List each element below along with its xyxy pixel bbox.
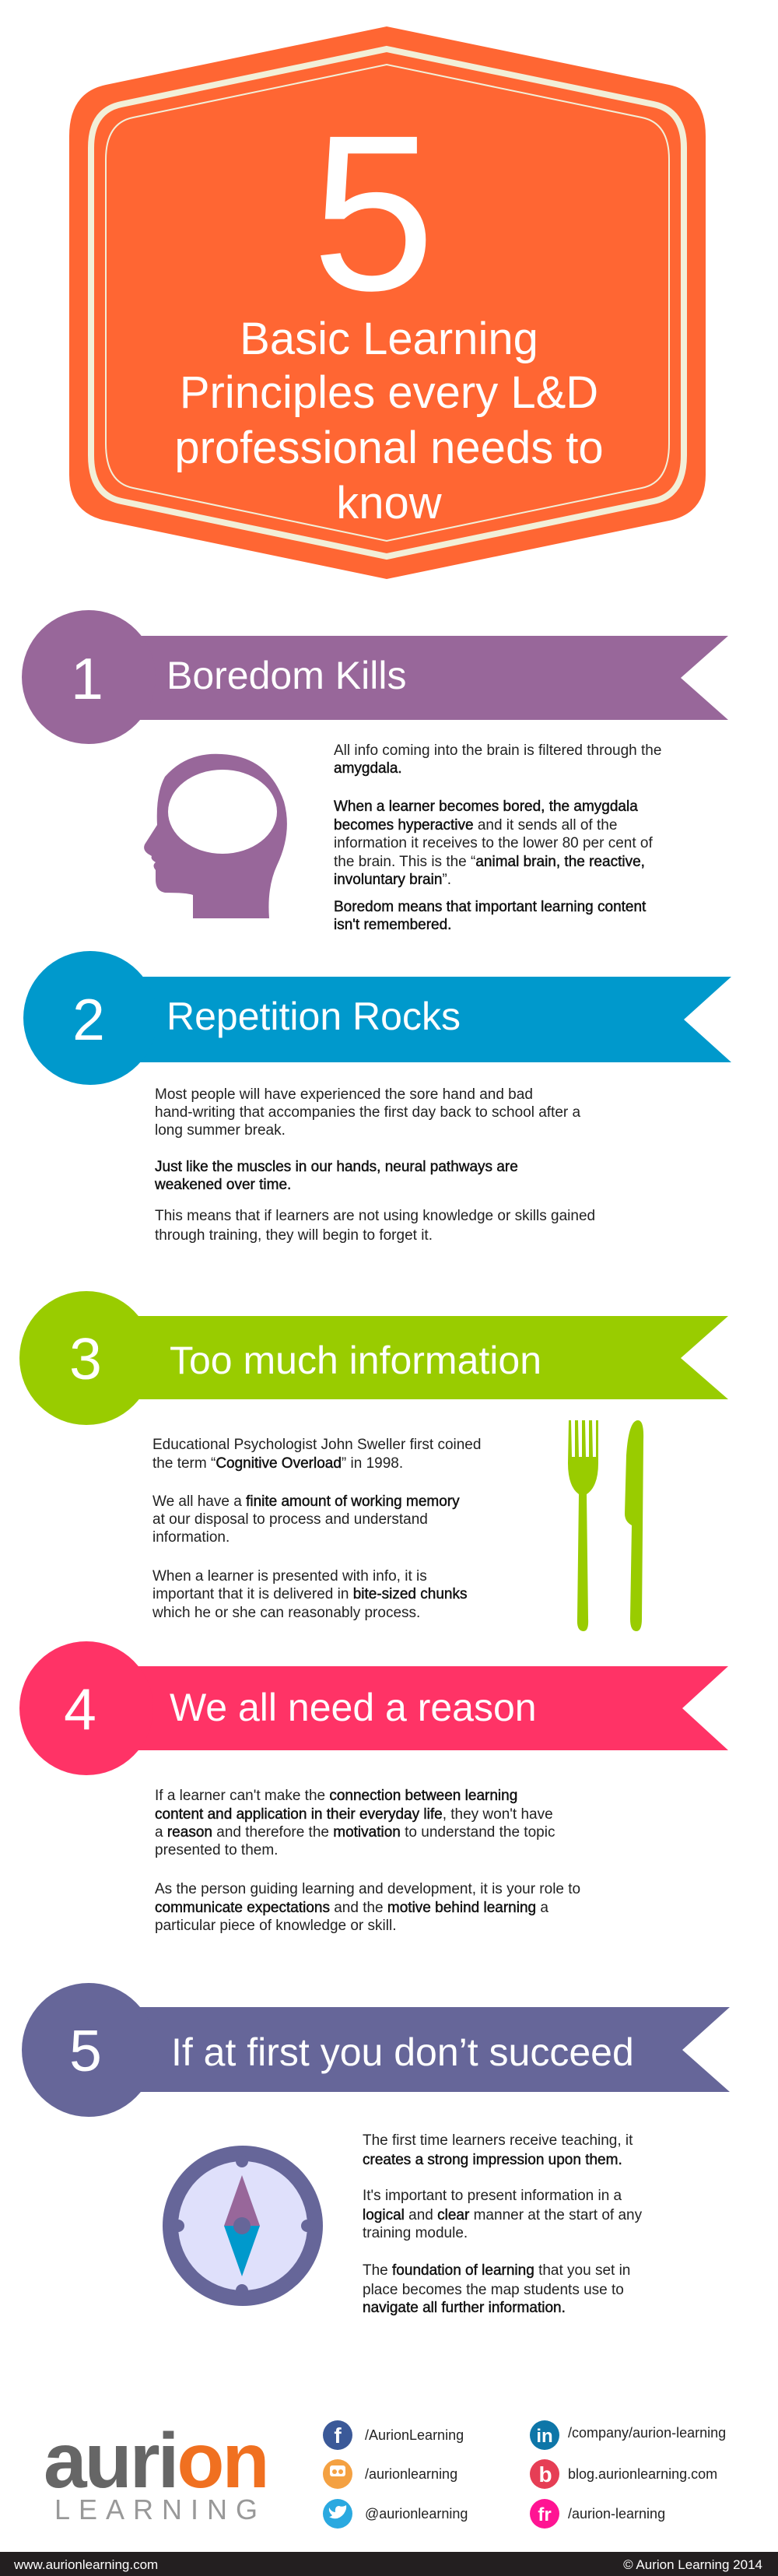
text: section 2: weakened over time.: [154, 1177, 291, 1193]
banner 4: We all need a reason: [19, 1641, 728, 1775]
banner 2: Repetition Rocks: Repetition Rocks: [166, 995, 461, 1038]
text: section 3: When a learner is presented with info, it is: [152, 1568, 427, 1585]
banner 3: Too much information: Too much information: [170, 1339, 541, 1382]
icon: blog: [530, 2459, 559, 2489]
icon: friendfeed: fr: [538, 2504, 552, 2525]
footer bar: www.aurionlearning.com: [13, 2557, 158, 2572]
header title: Basic Learning: [240, 314, 538, 364]
text: section 3: important that it is delivered in bite-sized chunks: [152, 1586, 467, 1602]
icon: facebook: f: [334, 2423, 342, 2448]
banner 5: If at first you don't succeed: If at first you don’t succeed: [171, 2030, 634, 2074]
text: section 5: [363, 2132, 643, 2316]
header badge: [69, 26, 706, 579]
social links: /company/aurion-learning: [568, 2425, 726, 2441]
banner 5: If at first you don't succeed: 5: [69, 2018, 102, 2083]
social links: blog.aurionlearning.com: [568, 2466, 717, 2482]
social links: [323, 2420, 726, 2529]
text: section 1: When a learner becomes bored, the amygdala: [334, 798, 638, 815]
text: section 1: Boredom means that important learning content: [334, 899, 647, 915]
text: section 3: We all have a finite amount of working memory: [152, 1493, 460, 1510]
text: section 1: [334, 742, 661, 933]
social links: /AurionLearning: [365, 2427, 464, 2443]
text: section 1: All info coming into the brain is filtered through the: [334, 742, 661, 759]
footer bar: © Aurion Learning 2014: [623, 2557, 762, 2572]
icon: compass: [163, 2146, 323, 2306]
header title: Principles every L&D: [180, 367, 598, 418]
banner 2: Repetition Rocks: [23, 951, 731, 1085]
banner 3: Too much information: 3: [69, 1326, 102, 1392]
icon: linkedin: in: [536, 2426, 553, 2447]
text: section 4: [155, 1788, 580, 1934]
icon: knife: [625, 1420, 643, 1631]
text: section 2: [154, 1086, 595, 1244]
banner 2: Repetition Rocks: 2: [72, 987, 105, 1052]
social links: @aurionlearning: [365, 2506, 468, 2522]
text: section 3: at our disposal to process and understand: [152, 1511, 428, 1528]
text: section 4: communicate expectations and the motive behind learning a: [155, 1900, 548, 1916]
footer bar: [0, 2552, 778, 2576]
text: section 1: information it receives to the lower 80 per cent of: [334, 835, 653, 851]
banner 4: We all need a reason: 4: [64, 1676, 96, 1742]
banner 1: Boredom Kills: 1: [71, 646, 103, 711]
icon: friendfeed: [530, 2499, 559, 2529]
text: section 4: a reason and therefore the motivation to understand the topic: [155, 1824, 555, 1841]
icon: head: [144, 754, 287, 918]
icon: twitter: [323, 2499, 352, 2529]
text: section 2: hand-writing that accompanies the first day back to school after a: [155, 1104, 580, 1121]
banner 1: Boredom Kills: [22, 610, 728, 744]
text: section 4: If a learner can't make the connection between learning: [155, 1788, 517, 1804]
banner 4: We all need a reason: We all need a reason: [170, 1686, 537, 1729]
text: section 3: [152, 1437, 481, 1621]
header title: professional needs to: [174, 423, 604, 473]
text: section 4: particular piece of knowledge or skill.: [155, 1918, 397, 1934]
banner 1: Boredom Kills: Boredom Kills: [166, 654, 406, 697]
text: section 5: It's important to present information in a: [363, 2188, 622, 2204]
text: section 3: the term “Cognitive Overload” in 1998.: [152, 1455, 403, 1472]
text: section 3: information.: [152, 1529, 230, 1546]
header title: know: [336, 478, 443, 528]
logo: aurion learning: aurion: [44, 2417, 268, 2504]
text: section 2: Most people will have experienced the sore hand and bad: [155, 1086, 533, 1103]
text: section 4: presented to them.: [155, 1842, 278, 1858]
icon: slideshare: [323, 2459, 352, 2489]
text: section 4: As the person guiding learning and development, it is your role to: [155, 1881, 580, 1897]
text: section 5: creates a strong impression upon them.: [363, 2152, 622, 2168]
text: section 4: content and application in their everyday life, they won't have: [155, 1806, 553, 1823]
social links: /aurion-learning: [568, 2506, 665, 2522]
text: section 1: becomes hyperactive and it sends all of the: [334, 817, 617, 834]
social links: /aurionlearning: [365, 2466, 457, 2482]
text: section 2: Just like the muscles in our hands, neural pathways are: [155, 1159, 518, 1175]
text: section 5: The foundation of learning that you set in: [363, 2262, 630, 2279]
text: section 5: training module.: [363, 2225, 468, 2241]
text: section 2: through training, they will begin to forget it.: [155, 1227, 433, 1244]
text: section 5: The first time learners receive teaching, it: [363, 2132, 633, 2149]
banner 5: If at first you don't succeed: [22, 1983, 730, 2117]
header number: 5: [312, 89, 435, 337]
text: section 3: Educational Psychologist John Sweller first coined: [152, 1437, 481, 1453]
text: section 5: place becomes the map students use to: [363, 2282, 624, 2298]
text: section 3: which he or she can reasonably process.: [152, 1605, 420, 1621]
text: section 2: This means that if learners are not using knowledge or skills gained: [155, 1208, 595, 1224]
text: section 5: logical and clear manner at the start of any: [363, 2207, 643, 2223]
text: section 1: isn't remembered.: [334, 917, 451, 933]
icon: linkedin: [530, 2420, 559, 2450]
icon: facebook: [323, 2420, 352, 2450]
text: section 1: involuntary brain”.: [334, 872, 451, 888]
banner 3: Too much information: [19, 1291, 728, 1425]
icon: fork: [568, 1420, 598, 1631]
text: section 1: amygdala.: [334, 760, 402, 777]
logo: aurion learning: LEARNING: [54, 2494, 266, 2525]
icon: blog: b: [538, 2462, 552, 2487]
text: section 2: long summer break.: [155, 1122, 286, 1139]
text: section 1: the brain. This is the “animal brain, the reactive,: [334, 854, 645, 870]
text: section 5: navigate all further information.: [363, 2300, 566, 2316]
